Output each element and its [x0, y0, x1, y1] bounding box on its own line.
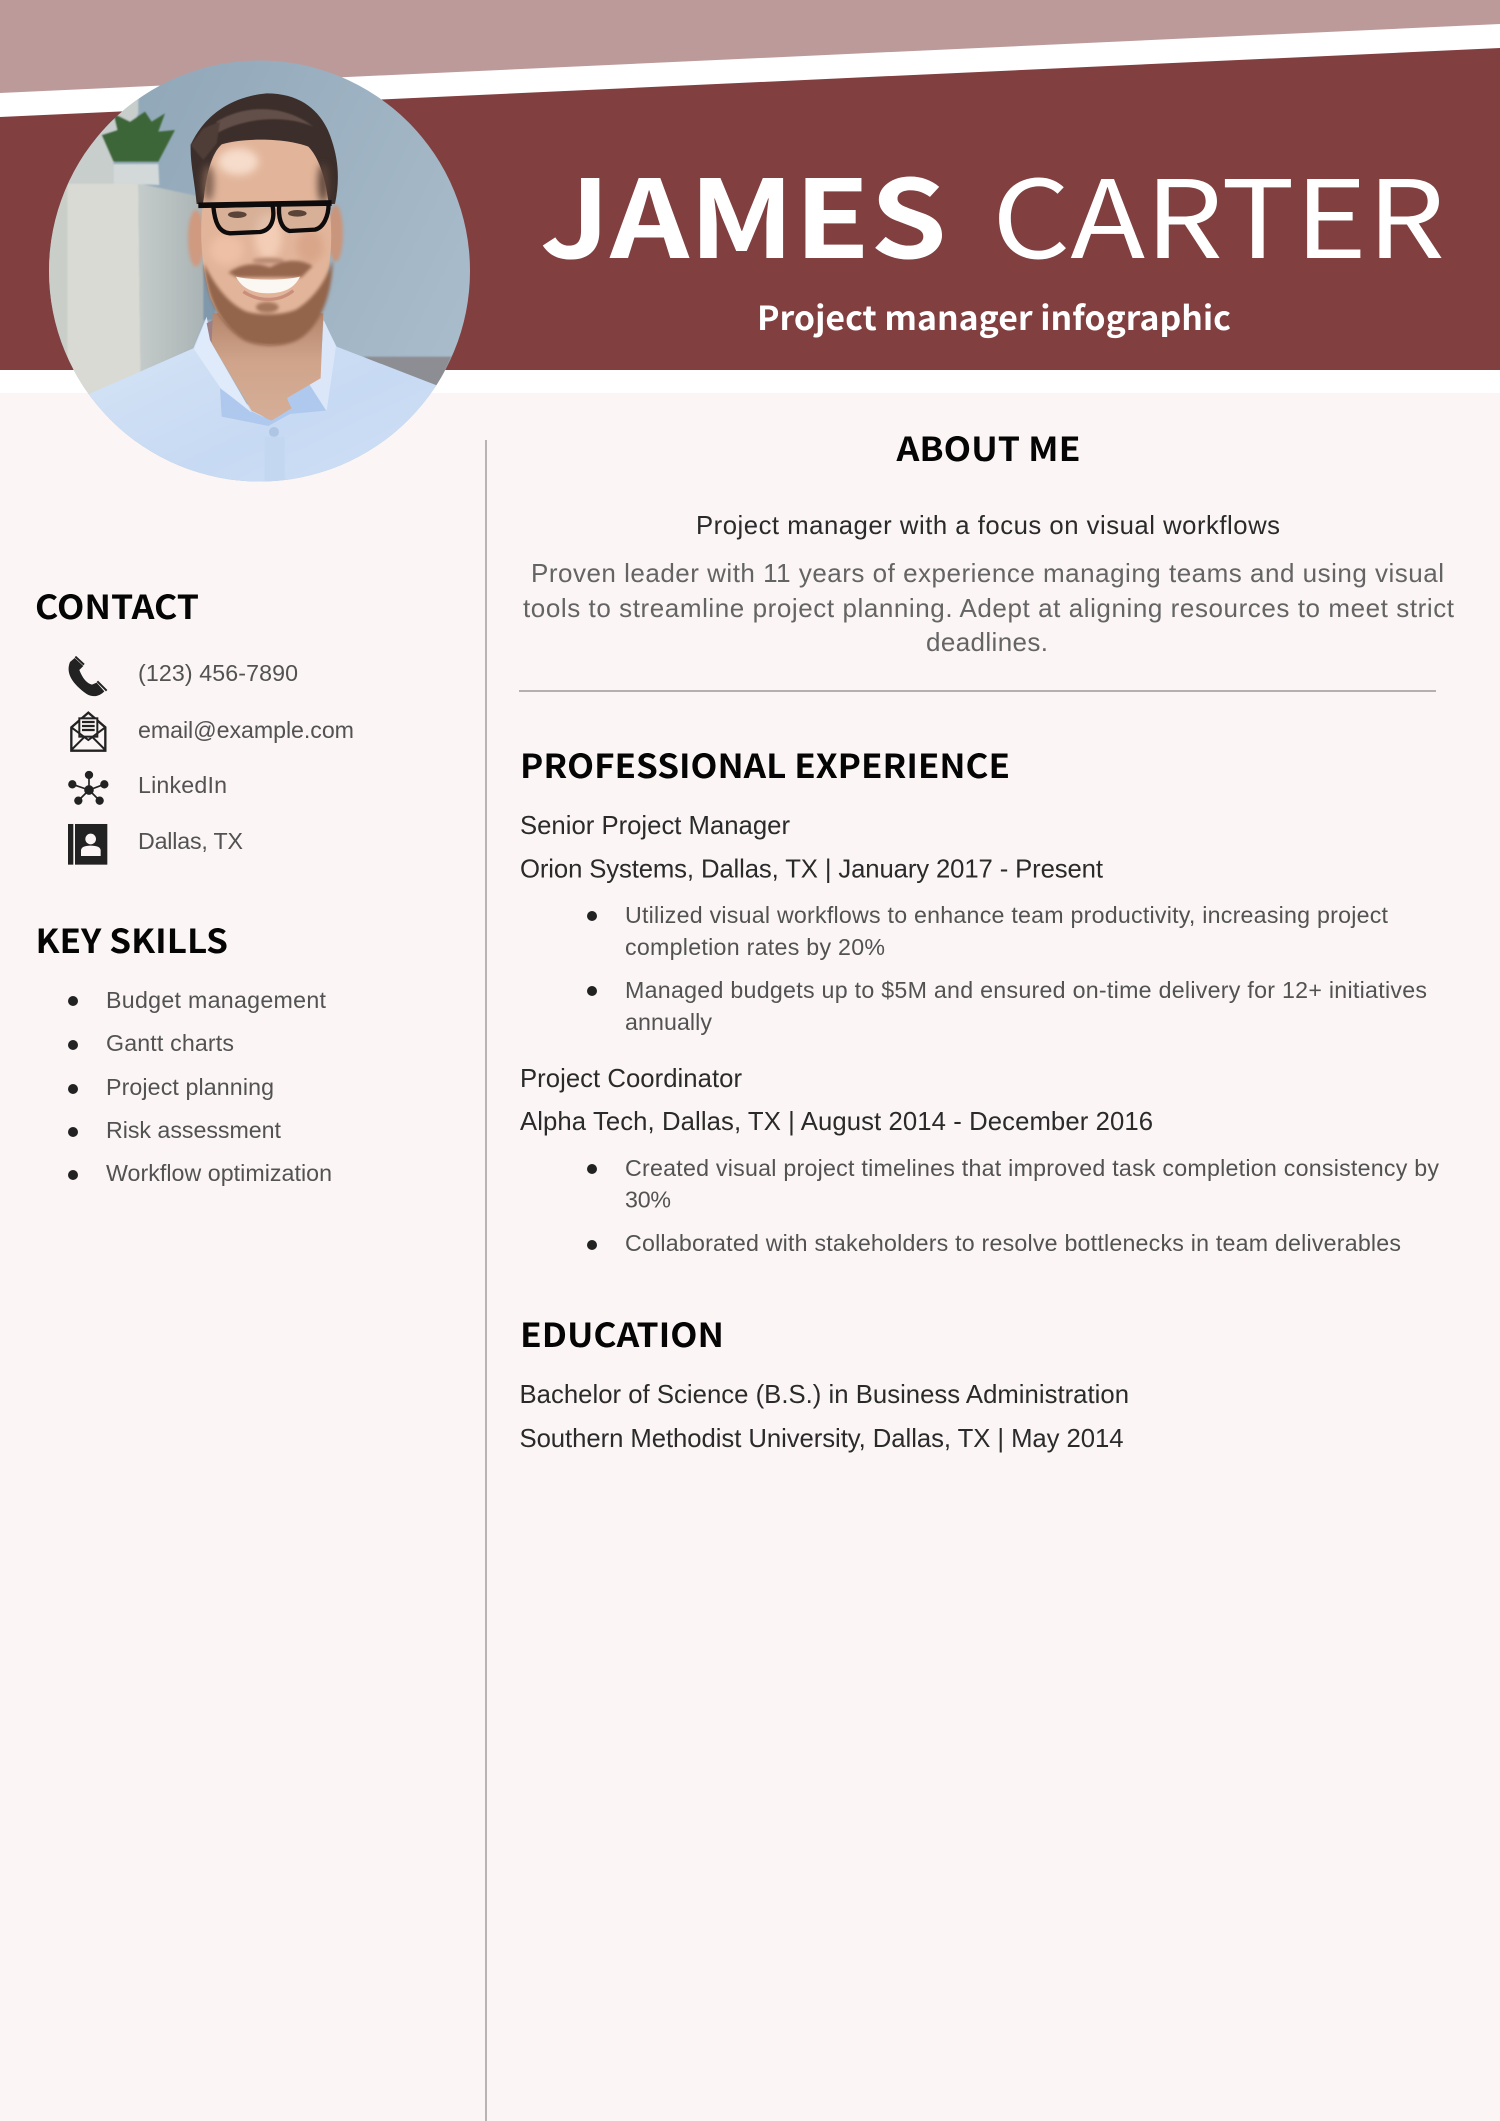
panel: professional experience: [520, 740, 1439, 1256]
subtitle: Project manager infographic: [757, 292, 1231, 340]
skills list: Project planning: [106, 1074, 274, 1100]
neck: [212, 313, 323, 421]
collar flaps: [194, 318, 252, 413]
heading: key skills: KEY SKILLS: [36, 915, 228, 963]
job: project coordinator: Alpha Tech, Dallas, TX | August 2014 - December 2016: [520, 1108, 1153, 1136]
job: project coordinator: Project Coordinator: [520, 1065, 742, 1093]
icon: network: [69, 772, 108, 804]
icon: address book: [68, 824, 107, 865]
skills list: Workflow optimization: [106, 1160, 332, 1186]
job: senior project manager: completion rates by 20%: [625, 934, 885, 960]
heading: education: EDUCATION: [520, 1309, 724, 1357]
heading: about me: ABOUT ME: [895, 423, 1080, 471]
icon: envelope: [71, 713, 105, 751]
heading: professional experience: PROFESSIONAL EXPERIENCE: [520, 740, 1010, 788]
job: senior project manager: Utilized visual workflows to enhance team productivity, increasing project: [625, 902, 1389, 928]
skills list: Gantt charts: [106, 1030, 234, 1056]
header background bands: [0, 0, 1500, 393]
about paragraph: deadlines.: [926, 627, 1048, 657]
heading: contact: CONTACT: [35, 581, 199, 629]
smile: [236, 277, 300, 293]
panel: about me: [523, 423, 1455, 657]
name title: [540, 134, 1445, 290]
panel: contact: [35, 581, 354, 865]
job: senior project manager: Orion Systems, Dallas, TX | January 2017 - Present: [520, 856, 1103, 884]
panel: key skills: [36, 915, 332, 1186]
about paragraph: Proven leader with 11 years of experience managing teams and using visual: [531, 558, 1444, 588]
job: project coordinator: Collaborated with stakeholders to resolve bottlenecks in team deliverables: [625, 1230, 1401, 1256]
degree details: Southern Methodist University, Dallas, TX | May 2014: [520, 1425, 1124, 1453]
job: project coordinator: [520, 1065, 1439, 1256]
job: senior project manager: [520, 812, 1427, 1035]
shirt: [87, 317, 440, 487]
phone number: (123) 456-7890: [138, 660, 298, 686]
name title: CARTER: [992, 134, 1445, 290]
job: senior project manager: Senior Project Manager: [520, 812, 790, 840]
beard: [204, 258, 333, 346]
collar inner shadow: [220, 385, 326, 426]
skills list: Risk assessment: [106, 1117, 282, 1143]
job: senior project manager: annually: [625, 1009, 712, 1035]
portrait photo: [49, 60, 470, 482]
panel: education: [520, 1309, 1129, 1453]
hair base: [191, 93, 338, 204]
about paragraph: [523, 558, 1455, 657]
face: [201, 140, 331, 345]
location: Dallas, TX: [138, 828, 243, 854]
email address: email@example.com: [138, 717, 354, 743]
hair highlights: [191, 109, 313, 160]
job: senior project manager: Managed budgets up to $5M and ensured on-time delivery for 12+ initiatives: [625, 977, 1427, 1003]
degree details: Bachelor of Science (B.S.) in Business Administration: [520, 1381, 1129, 1409]
skills list: [68, 987, 332, 1186]
skills list: Budget management: [106, 987, 327, 1013]
icon: phone: [69, 657, 107, 696]
degree details: [520, 1381, 1129, 1453]
about subtitle: Project manager with a focus on visual workflows: [696, 512, 1280, 540]
about paragraph: tools to streamline project planning. Adept at aligning resources to meet strict: [523, 593, 1455, 623]
linkedin label: LinkedIn: [138, 772, 227, 798]
job: project coordinator: Created visual project timelines that improved task completion consistency by: [625, 1155, 1439, 1181]
job: project coordinator: 30%: [625, 1186, 671, 1212]
vertical divider: [485, 440, 487, 2121]
glasses: [198, 203, 332, 233]
ears: [188, 205, 343, 267]
name title: JAMES: [540, 134, 947, 290]
